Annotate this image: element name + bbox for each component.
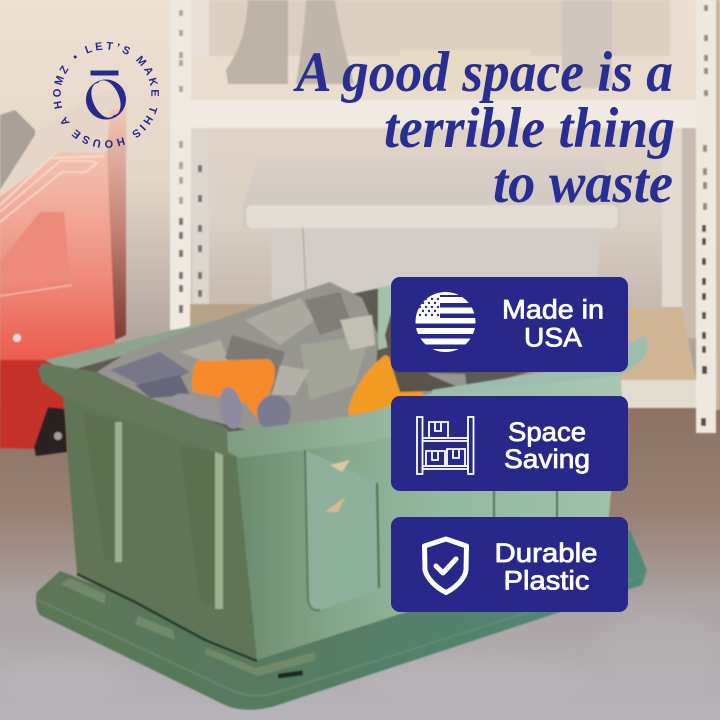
icon: american flag circle — [415, 292, 476, 352]
metal shelving unit — [170, 0, 720, 433]
bin left face — [63, 395, 257, 660]
gray glove fingers — [169, 388, 221, 424]
label: space saving — [504, 417, 590, 474]
icon: storage shelf with boxes — [417, 417, 474, 474]
label: space saving: Space — [508, 417, 586, 447]
garage wall — [0, 0, 720, 440]
circular slogan: • LET’S MAKE THIS HOUSE A HOMZ — [53, 42, 159, 148]
orange gloves — [192, 359, 275, 420]
title — [293, 41, 675, 215]
storage tote on lower shelf — [243, 158, 620, 228]
badge: durable plastic — [391, 517, 628, 612]
camouflage fabric — [97, 282, 467, 432]
title: terrible thing — [384, 97, 675, 160]
upper shelf items — [400, 50, 530, 92]
bin ribs — [83, 412, 557, 610]
brand logo — [53, 42, 159, 148]
label: space saving: Saving — [504, 444, 590, 474]
red equipment — [0, 85, 127, 456]
bin right face — [236, 372, 622, 660]
bin rim — [38, 363, 240, 458]
logo mark: o with macron — [86, 70, 126, 119]
label: durable plastic — [494, 538, 598, 596]
green storage bin — [36, 282, 648, 710]
bin base tray — [36, 530, 647, 710]
floor mottling — [0, 610, 720, 704]
label: made in USA: USA — [524, 322, 582, 352]
title: to waste — [493, 152, 673, 215]
label: durable plastic: Plastic — [504, 566, 590, 596]
shadow under bin — [77, 574, 257, 661]
boots on upper shelf — [226, 0, 288, 84]
badge: space saving — [391, 396, 628, 491]
right shelf post — [670, 0, 688, 55]
label: made in USA: Made in — [502, 294, 604, 324]
label: durable plastic: Durable — [494, 538, 598, 568]
garage floor — [0, 405, 720, 720]
tray ledges — [60, 578, 316, 676]
lower right shelf — [620, 308, 696, 380]
icon: shield with check mark — [424, 539, 466, 592]
badge: made in USA — [391, 277, 628, 372]
label: made in USA — [502, 294, 604, 352]
bin interior — [60, 287, 625, 440]
left shelf post — [170, 0, 191, 330]
title: A good space is a — [293, 41, 673, 104]
upper shelf beam — [190, 100, 700, 128]
